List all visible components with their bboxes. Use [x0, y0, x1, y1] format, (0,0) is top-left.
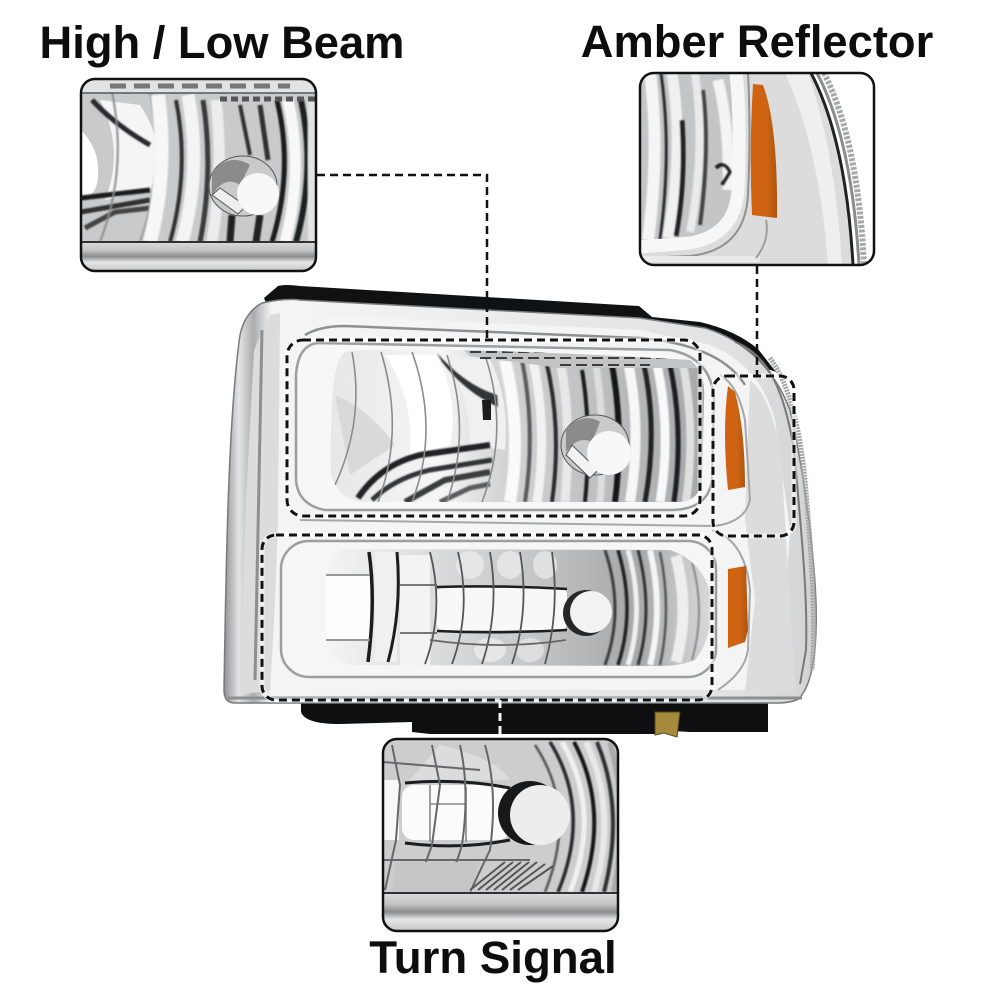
title: High / Low Beam: High / Low Beam: [40, 17, 404, 68]
lower lens: grid lines: [326, 552, 566, 664]
lower lens: left bright area: [326, 575, 370, 640]
upper lens: chrome stripes: [505, 360, 690, 502]
bottom chrome edge: [228, 696, 802, 700]
lower lens: pale blobs: [456, 551, 484, 579]
central white box: [402, 785, 510, 840]
left chrome column: [240, 313, 280, 695]
inset panel: turn signal detail: [383, 739, 621, 931]
pale upper band: [410, 745, 510, 780]
inset panel: high/low beam detail: [81, 79, 316, 271]
bottom chrome trim: [82, 243, 315, 268]
lower lens: [325, 548, 715, 668]
bottom chrome trim: [384, 894, 617, 926]
dark rim line: [735, 342, 806, 684]
title: Amber Reflector: Amber Reflector: [581, 16, 933, 67]
chrome stripes: [100, 92, 312, 242]
upper lens: dark bottom streaks: [358, 445, 492, 502]
mounting tab: [655, 712, 680, 737]
ribbed outer rim: [770, 358, 814, 670]
connector: turn signal: [498, 700, 502, 739]
dashed highlight: high/low beam: [287, 340, 700, 516]
white bezel curve: [640, 73, 739, 247]
upper bezel: [296, 343, 714, 510]
upper amber reflector: [725, 386, 745, 490]
black upper housing: [264, 285, 776, 372]
lens reflections: [640, 73, 735, 240]
chrome bezel body: [224, 299, 816, 703]
gray right panel: [745, 380, 795, 692]
dashed highlight: turn signal: [262, 535, 712, 700]
lower lens: bulb: [563, 590, 602, 636]
headlight assembly: [224, 285, 816, 737]
grid lines: [383, 745, 530, 892]
gray body panel: [640, 73, 853, 265]
upper lens: left reflections: [335, 395, 395, 475]
connector: amber reflector: [756, 266, 758, 376]
dashed highlight: amber reflector: [713, 376, 794, 536]
inset panel: amber reflector detail: [640, 73, 874, 265]
bulb: [209, 156, 277, 216]
reflections left: [82, 132, 98, 196]
black lower housing: [301, 700, 768, 734]
upper lens: [325, 345, 710, 505]
lower amber reflector: [728, 566, 748, 648]
outer rim: [811, 73, 853, 265]
upper chrome arc: [305, 326, 745, 385]
lower lens: central bright area: [437, 588, 567, 630]
title: Turn Signal: Turn Signal: [369, 932, 617, 983]
left edge white: [383, 780, 399, 840]
right curved stripes: [535, 742, 621, 892]
upper lens: flute lines: [335, 352, 497, 502]
upper lens: top chrome cluster: [464, 350, 697, 368]
bulb: [498, 781, 548, 845]
lower gray texture: [414, 862, 473, 892]
lower lens: right fine stripes: [605, 550, 699, 665]
upper lens: bulb: [561, 415, 629, 475]
white upper panel: [270, 313, 790, 690]
connector: high/low beam: [317, 175, 487, 340]
top chrome trim: [82, 80, 314, 92]
amber reflector: [751, 84, 777, 218]
lower bezel: [281, 541, 716, 677]
